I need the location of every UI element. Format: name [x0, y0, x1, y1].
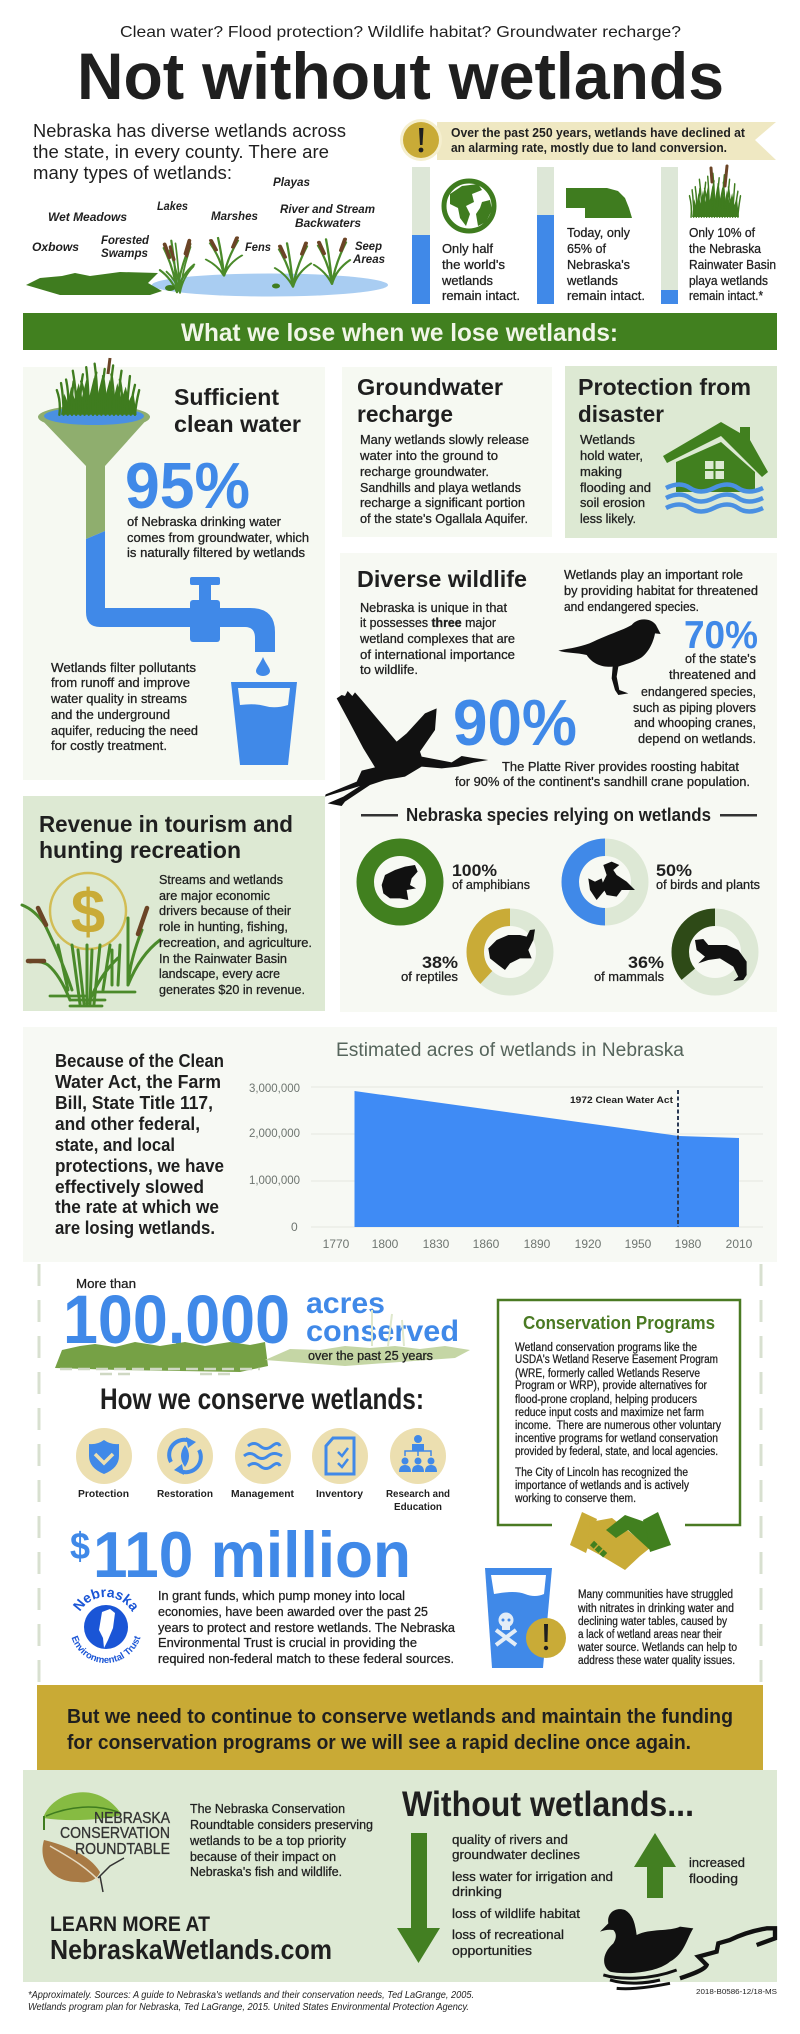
icon: contaminated glass: [485, 1568, 566, 1668]
panel: wetland types: [26, 121, 388, 296]
panel: without wetlands: [23, 1770, 777, 1989]
footnote: [28, 1990, 474, 2013]
body text: reduce input costs and maximize net farm: [515, 1407, 704, 1419]
stat: 90%: 90%: [453, 686, 577, 759]
donut: reptiles: 38%: [422, 953, 458, 972]
logo: Nebraska Conservation Roundtable: ROUNDTABLE: [75, 1841, 170, 1858]
Platte River text: [455, 759, 750, 789]
wetland type labels: Wet Meadows: [48, 212, 127, 224]
wetland type labels: Swamps: [101, 248, 148, 260]
wetland type labels: Marshes: [211, 211, 258, 223]
y axis labels: 1,000,000: [249, 1173, 300, 1187]
declines list: loss of recreational: [452, 1927, 564, 1942]
icon: globe: [444, 181, 494, 231]
x axis labels: 2010: [726, 1237, 753, 1251]
stat description: of Nebraska drinking water: [127, 514, 282, 529]
intro text: [33, 121, 346, 183]
habitat text: by providing habitat for threatened: [564, 583, 758, 598]
body text: landscape, every acre: [159, 966, 280, 981]
wetland complexes text: it possesses three major: [360, 615, 497, 630]
body text: income. There are numerous other voluntary: [515, 1420, 721, 1432]
method: protection: Protection: [78, 1488, 129, 1500]
logo: Nebraska Conservation Roundtable: [42, 1792, 171, 1892]
Clean Water Act statement: effectively slowed: [55, 1176, 204, 1197]
nitrates text: a lack of wetland areas near their: [578, 1629, 722, 1641]
stat: 10% of playa wetlands: [661, 166, 776, 304]
heading: recharge: [357, 401, 453, 427]
Platte River text: for 90% of the continent's sandhill crane population.: [455, 774, 750, 789]
donut: amphibians: 100%: [452, 861, 497, 880]
heading: without wetlands: Without wetlands...: [402, 1785, 694, 1824]
stat: 100,000 acres: More than: [76, 1276, 136, 1291]
Clean Water Act statement: the rate at which we: [55, 1196, 219, 1217]
heading: Revenue in tourism and: [39, 811, 293, 837]
body text: are major economic: [159, 888, 270, 903]
logo: Nebraska Environmental Trust: Nebraska: [72, 1589, 137, 1612]
body text: Wetlands: [580, 432, 635, 447]
panel: groundwater recharge: [342, 367, 552, 537]
donut: reptiles: of reptiles: [401, 969, 458, 984]
habitat text: Wetlands play an important role: [564, 567, 743, 582]
icon: faucet and pipe: [86, 531, 275, 652]
wetland type labels: Backwaters: [295, 218, 361, 230]
logo: Nebraska Conservation Roundtable: NEBRASKA: [94, 1810, 171, 1827]
Clean Water Act statement: state, and local: [55, 1134, 175, 1155]
wetland type labels: Fens: [245, 242, 271, 254]
method: inventory: Inventory: [316, 1488, 363, 1500]
footnote: *Approximately. Sources: A guide to Nebraska's wetlands and their conservation needs, Ted LaGrange, 2005.: [28, 1990, 474, 2001]
grant funds text: economies, have been awarded over the past 25: [158, 1604, 428, 1619]
icon: coin in cattails: $: [71, 878, 105, 947]
stat: 65% of Nebraska's wetlands: remain intact.: [567, 288, 645, 303]
heading: Diverse wildlife: [357, 566, 527, 592]
wetland type labels: Areas: [352, 254, 385, 266]
grant funds text: Environmental Trust is crucial in providing the: [158, 1635, 417, 1650]
declines list: loss of wildlife habitat: [452, 1906, 580, 1921]
pond illustration: [26, 238, 388, 296]
logo: Nebraska Environmental Trust: Environmental Trust: [72, 1636, 140, 1664]
stat: 10% of playa wetlands: remain intact.*: [689, 288, 763, 303]
habitat text: [564, 567, 758, 614]
donut: reptiles: [401, 917, 545, 987]
icon: water drop: [256, 657, 270, 676]
nitrates text: with nitrates in drinking water and: [577, 1603, 734, 1615]
x axis labels: 1830: [423, 1237, 450, 1251]
stat description: and whooping cranes,: [634, 715, 756, 730]
heading: [357, 374, 503, 427]
declines list: [452, 1832, 613, 1958]
Clean Water Act statement: Bill, State Title 117,: [55, 1092, 213, 1113]
Platte River text: The Platte River provides roosting habitat: [502, 759, 739, 774]
body text: The City of Lincoln has recognized the: [515, 1467, 688, 1479]
title: Not without wetlands: [77, 39, 724, 113]
icon: flooded house: [663, 422, 768, 512]
stat: half of world's wetlands: remain intact.: [442, 288, 520, 303]
stat: 100,000 acres: [55, 1276, 470, 1374]
donut: amphibians: [365, 847, 530, 917]
stat: 65% of Nebraska's wetlands: Today, only: [567, 225, 630, 240]
Clean Water Act statement: are losing wetlands.: [55, 1217, 215, 1238]
nitrates text: Many communities have struggled: [578, 1589, 733, 1601]
heading: [174, 384, 301, 437]
footnote: Wetlands program plan for Nebraska, Ted LaGrange, 2015. United States Environmental Protection Agency.: [28, 2002, 469, 2013]
increased flooding text: increased: [689, 1855, 745, 1870]
body text: working to conserve them.: [514, 1493, 636, 1505]
wetland type labels: Playas: [273, 177, 310, 189]
icon: glass of water: [231, 682, 297, 765]
Clean Water Act statement: and other federal,: [55, 1113, 200, 1134]
stat: 95%: 95%: [125, 449, 250, 522]
wetland complexes text: [359, 600, 515, 677]
nitrates text: declining water tables, caused by: [578, 1616, 727, 1628]
declines list: drinking: [452, 1884, 502, 1899]
heading: disaster: [578, 401, 664, 427]
body text: making: [580, 464, 622, 479]
1972 marker: [570, 1090, 678, 1227]
habitat text: and endangered species.: [564, 599, 699, 614]
wetland type labels: Oxbows: [32, 242, 79, 254]
body text: flood-prone cropland, helping producers: [515, 1394, 697, 1406]
x axis labels: 1980: [675, 1237, 702, 1251]
heading: [578, 374, 751, 427]
wetland complexes text: to wildlife.: [360, 662, 418, 677]
wetland complexes text: of international importance: [360, 647, 515, 662]
method: restoration: [157, 1428, 213, 1500]
body text: Wetland conservation programs like the: [515, 1342, 697, 1354]
declines list: quality of rivers and: [452, 1832, 568, 1847]
body text: flooding and: [580, 480, 651, 495]
stat: 65% of Nebraska's wetlands: [537, 167, 645, 304]
body text: Many wetlands slowly release: [360, 432, 529, 447]
Clean Water Act statement: Because of the Clean: [55, 1050, 224, 1071]
filter description: [50, 660, 198, 753]
body text: of the state's Ogallala Aquifer.: [360, 511, 528, 526]
method: research and education: [386, 1428, 450, 1513]
stat: $110 million: $: [70, 1526, 90, 1568]
icon: warning badge: [526, 1618, 566, 1658]
grant funds text: required non-federal match to these federal sources.: [158, 1651, 454, 1666]
stat description: endangered species,: [641, 684, 756, 699]
heading: Groundwater: [357, 374, 503, 400]
Clean Water Act statement: Water Act, the Farm: [55, 1071, 221, 1092]
icon: Nebraska map: [566, 188, 632, 218]
method: management: Management: [231, 1488, 294, 1500]
declines list: opportunities: [452, 1943, 533, 1958]
Clean Water Act statement: [55, 1050, 224, 1238]
panel: conservation programs: [498, 1300, 740, 1525]
wetland type labels: River and Stream: [280, 204, 375, 216]
method: management: [231, 1428, 294, 1500]
alert banner: Over the past 250 years, wetlands have declined at: [451, 126, 746, 140]
stat: 10% of playa wetlands: the Nebraska: [689, 241, 762, 256]
x axis labels: 1920: [575, 1237, 602, 1251]
donut: mammals: [594, 917, 750, 987]
donut: amphibians: of amphibians: [452, 877, 530, 892]
grass strip: [55, 1310, 470, 1374]
species heading: Nebraska species relying on wetlands: [406, 805, 711, 825]
heading: clean water: [174, 411, 301, 437]
x axis labels: 1890: [524, 1237, 551, 1251]
icon: wetland grass: [690, 166, 740, 217]
heading: Protection from: [578, 374, 751, 400]
learn more link: NebraskaWetlands.com: [50, 1934, 332, 1965]
filter description: from runoff and improve: [51, 675, 190, 690]
stat description: [127, 514, 309, 560]
icon: duck silhouette: [600, 1909, 775, 1989]
donut: birds and plants: 50%: [656, 861, 692, 880]
body text: drivers because of their: [159, 903, 292, 918]
stat: 100,000 acres: over the past 25 years: [308, 1348, 433, 1363]
body text: recreation, and agriculture.: [159, 935, 312, 950]
filter description: for costly treatment.: [51, 738, 167, 753]
method: protection: [76, 1428, 132, 1500]
1972 marker: 1972 Clean Water Act: [570, 1095, 674, 1106]
nitrates text: address these water quality issues.: [578, 1655, 735, 1667]
stat: 10% of playa wetlands: playa wetlands: [689, 273, 768, 288]
body text: Program or WRP), provide alternatives for: [515, 1380, 707, 1392]
filter description: water quality in streams: [50, 691, 187, 706]
stat: 65% of Nebraska's wetlands: wetlands: [566, 273, 618, 288]
stat description: such as piping plovers: [633, 700, 756, 715]
panel: diverse wildlife: [325, 553, 777, 1012]
increased flooding text: flooding: [689, 1871, 738, 1886]
stat: 10% of playa wetlands: Rainwater Basin: [689, 257, 776, 272]
body text: [359, 432, 529, 526]
icon: handshake: [570, 1512, 671, 1570]
logo: Nebraska Conservation Roundtable: CONSERVATION: [60, 1825, 170, 1842]
body text: recharge a significant portion: [360, 495, 525, 510]
method: research and education: Research and: [386, 1488, 450, 1500]
body text: incentive programs for wetland conservation: [515, 1433, 718, 1445]
x axis labels: [323, 1237, 753, 1251]
x axis labels: 1860: [473, 1237, 500, 1251]
body text: importance of wetlands and is actively: [515, 1480, 689, 1492]
x axis labels: 1950: [625, 1237, 652, 1251]
wetland complexes text: Nebraska is unique in that: [360, 600, 507, 615]
stat description: [633, 651, 756, 746]
panel: sufficient clean water: [23, 358, 325, 780]
intro text: many types of wetlands:: [33, 163, 232, 183]
nitrates text: [577, 1589, 737, 1667]
stat: 65% of Nebraska's wetlands: 65% of: [567, 241, 606, 256]
y axis labels: [249, 1081, 300, 1234]
body text: role in hunting, fishing,: [159, 919, 288, 934]
area series: [354, 1091, 739, 1227]
body text: Streams and wetlands: [159, 872, 283, 887]
body text: In the Rainwater Basin: [159, 951, 287, 966]
icon: plover silhouette: [558, 619, 661, 695]
stat: 100,000 acres: acres: [306, 1287, 385, 1320]
panel: estimated acres chart: [23, 1027, 777, 1262]
roundtable text: [189, 1801, 373, 1879]
panel: protection from disaster: [565, 366, 777, 538]
body text: generates $20 in revenue.: [159, 982, 305, 997]
roundtable text: Roundtable considers preserving: [190, 1817, 373, 1832]
declines list: less water for irrigation and: [452, 1869, 613, 1884]
roundtable text: The Nebraska Conservation: [190, 1801, 345, 1816]
wetland type labels: Forested: [101, 235, 150, 247]
body text: USDA's Wetland Reserve Easement Program: [515, 1354, 718, 1366]
section banner: [23, 313, 777, 350]
y axis labels: 0: [291, 1220, 298, 1234]
wetland type labels: [32, 177, 385, 266]
stat description: depend on wetlands.: [638, 731, 756, 746]
icon: filtering funnel: [38, 358, 150, 539]
heading: how we conserve: How we conserve wetlands:: [100, 1383, 424, 1416]
icon: sandhill crane silhouette: [325, 691, 488, 806]
grant funds text: years to protect and restore wetlands. The Nebraska: [158, 1620, 456, 1635]
y axis labels: 3,000,000: [249, 1081, 300, 1095]
arrow: up: [634, 1833, 676, 1898]
stat: $110 million: 110 million: [93, 1518, 411, 1591]
filter description: aquifer, reducing the need: [51, 723, 198, 738]
grant funds text: In grant funds, which pump money into local: [158, 1588, 405, 1603]
body text: provided by federal, state, and local agencies.: [515, 1446, 718, 1458]
stat: half of world's wetlands: the world's: [442, 257, 506, 272]
callout: continue to conserve: [37, 1685, 763, 1770]
body text: less likely.: [580, 511, 636, 526]
method: inventory: [312, 1428, 368, 1500]
stat: half of world's wetlands: Only half: [442, 241, 493, 256]
roundtable text: wetlands to be a top priority: [189, 1833, 346, 1848]
donut: birds and plants: of birds and plants: [656, 877, 760, 892]
stat description: comes from groundwater, which: [127, 530, 309, 545]
area chart: [249, 1040, 763, 1251]
document code: 2018-B0586-12/18-MS: [696, 1987, 777, 1996]
heading: [39, 811, 293, 863]
alert banner: an alarming rate, mostly due to land conversion.: [451, 141, 727, 155]
roundtable text: Nebraska's fish and wildlife.: [190, 1864, 342, 1879]
grant funds text: [158, 1588, 456, 1666]
body text: hold water,: [580, 448, 643, 463]
body text: soil erosion: [580, 495, 645, 510]
icon: coin in cattails: [22, 873, 160, 1006]
heading: Sufficient: [174, 384, 279, 410]
increased flooding text: [689, 1855, 745, 1886]
arrow: down: [397, 1833, 440, 1963]
nitrates text: water source. Wetlands can help to: [577, 1642, 737, 1654]
learn more link: [50, 1913, 332, 1965]
roundtable text: because of their impact on: [190, 1849, 336, 1864]
method: restoration: Restoration: [157, 1488, 213, 1500]
method: research and education: Education: [394, 1501, 442, 1513]
subtitle: Clean water? Flood protection? Wildlife habitat? Groundwater recharge?: [120, 24, 681, 41]
section banner: What we lose when we lose wetlands:: [181, 319, 618, 347]
alert banner: [400, 119, 776, 161]
heading: Conservation Programs: [523, 1312, 715, 1333]
logo: Nebraska Environmental Trust: [72, 1589, 140, 1664]
x axis labels: 1770: [323, 1237, 350, 1251]
stat description: of the state's: [685, 651, 756, 666]
stat: 10% of playa wetlands: Only 10% of: [689, 225, 755, 240]
wetland type labels: Seep: [355, 241, 382, 253]
declines list: groundwater declines: [452, 1847, 581, 1862]
intro text: the state, in every county. There are: [33, 142, 329, 162]
x axis labels: 1800: [372, 1237, 399, 1251]
y axis labels: 2,000,000: [249, 1126, 300, 1140]
heading: hunting recreation: [39, 837, 241, 863]
Clean Water Act statement: protections, we have: [55, 1155, 224, 1176]
body text: water into the ground to: [359, 448, 498, 463]
stat: half of world's wetlands: wetlands: [441, 273, 493, 288]
callout: continue to conserve: But we need to continue to conserve wetlands and maintain the funding: [67, 1705, 733, 1728]
filter description: Wetlands filter pollutants: [51, 660, 197, 675]
stat: 65% of Nebraska's wetlands: Nebraska's: [567, 257, 630, 272]
stat description: threatened and: [669, 667, 756, 682]
body text: [514, 1342, 721, 1505]
body text: [580, 432, 651, 526]
donut: mammals: of mammals: [594, 969, 664, 984]
donut: birds and plants: [562, 838, 760, 926]
stat: 100,000 acres: 100,000: [63, 1281, 290, 1358]
body text: (WRE, formerly called Wetlands Reserve: [515, 1368, 700, 1380]
chart title: Estimated acres of wetlands in Nebraska: [336, 1040, 684, 1061]
intro text: Nebraska has diverse wetlands across: [33, 121, 346, 141]
stat: 70%: 70%: [684, 614, 758, 657]
panel: how we conserve: [38, 1264, 762, 1682]
filter description: and the underground: [51, 707, 170, 722]
wetland type labels: Lakes: [157, 201, 188, 213]
stat description: is naturally filtered by wetlands: [127, 545, 306, 560]
body text: recharge groundwater.: [360, 464, 489, 479]
body text: Sandhills and playa wetlands: [360, 480, 521, 495]
wetland complexes text: wetland complexes that are: [359, 631, 515, 646]
panel: revenue in tourism: [22, 796, 325, 1011]
callout: continue to conserve: for conservation programs or we will see a rapid decline once again.: [67, 1731, 691, 1754]
stat: half of world's wetlands: [412, 167, 520, 304]
learn more link: LEARN MORE AT: [50, 1913, 210, 1936]
stat: 100,000 acres: conserved: [306, 1315, 459, 1348]
donut: mammals: 36%: [628, 953, 664, 972]
body text: [159, 872, 312, 997]
